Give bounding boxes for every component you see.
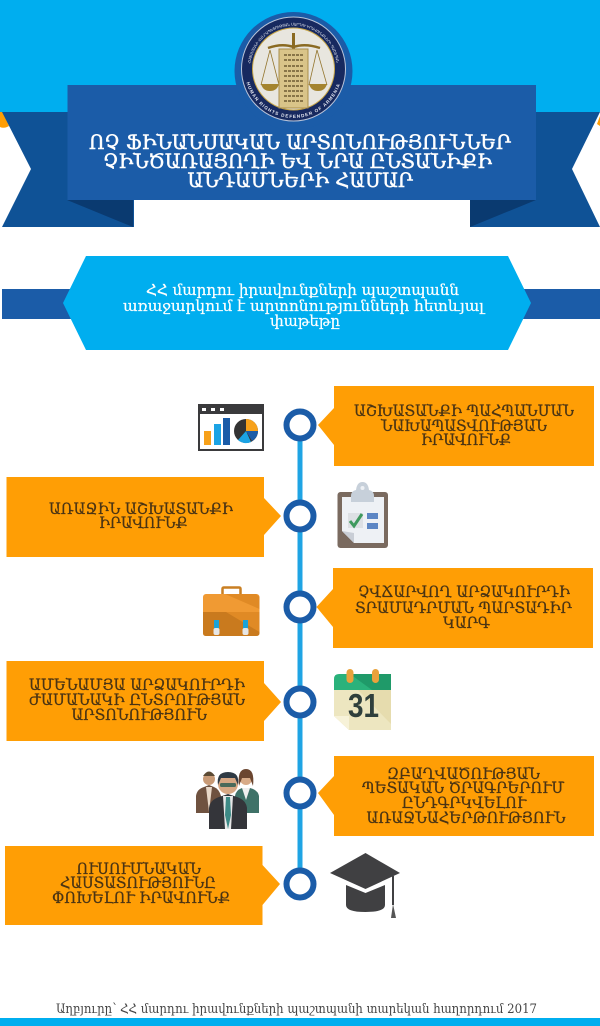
- card 1: ԻՐԱՎՈՒՆՔ: [421, 431, 511, 449]
- card 4: ԱՄԵՆԱՄՅԱ ԱՐՁԱԿՈՒՐԴԻ: [29, 676, 245, 694]
- icon: graduation cap: [330, 853, 400, 918]
- card 1: ՆԱԽԱՊԱՏՎՈՒԹՅԱՆ: [380, 417, 548, 435]
- source note: Աղբյուրը՝ ՀՀ մարդու իրավունքների պաշտպանի տարեկան հաղորդում 2017: [56, 1002, 537, 1017]
- card 1: ԱՇԽԱՏԱՆՔԻ ՊԱՀՊԱՆՄԱՆ: [354, 402, 575, 420]
- title: ՈՉ ՖԻՆԱՆՍԱԿԱՆ ԱՐՏՈՆՈՒԹՅՈՒՆՆԵՐ: [89, 130, 511, 154]
- icon: calendar 31: [334, 669, 391, 730]
- icon: business people: [196, 769, 259, 829]
- card 3: [316, 568, 593, 648]
- icon: briefcase: [203, 588, 260, 636]
- card 6: ՈՒՍՈՒՄՆԱԿԱՆ: [76, 860, 202, 878]
- card 3: ՏՐԱՄԱԴՐՄԱՆ ՊԱՐՏԱԴԻՐ: [355, 599, 572, 617]
- intro hexagon with text: ՀՀ մարդու իրավունքների պաշտպանն: [146, 281, 459, 299]
- title: ՉԻՆԾԱՌԱՅՈՂԻ ԵՎ ՆՐԱ ԸՆՏԱՆԻՔԻ: [103, 149, 493, 173]
- title ribbon: [2, 85, 600, 227]
- icon: dashboard charts: [198, 404, 264, 451]
- timeline nodes: [286, 412, 314, 898]
- card 5: ԱՌԱՋՆԱՀԵՐԹՈՒԹՅՈՒՆ: [366, 809, 566, 827]
- card 4: ԱՐՏՈՆՈՒԹՅՈՒՆ: [72, 706, 208, 724]
- top blue background: [0, 0, 600, 112]
- intro hexagon with text: փաթեթը: [270, 312, 340, 330]
- logo: Human Rights Defender emblem: [234, 12, 352, 122]
- card 5: [318, 756, 594, 836]
- intro hexagon with text: առաջարկում է արտոնությունների հետևյալ: [123, 297, 485, 315]
- title: [89, 130, 511, 192]
- title: ԱՆԴԱՄՆԵՐԻ ՀԱՄԱՐ: [188, 168, 413, 192]
- card 6: [5, 846, 280, 925]
- intro bar: [2, 289, 600, 319]
- card 2: ԻՐԱՎՈՒՆՔ: [99, 514, 188, 532]
- intro hexagon with text: [63, 256, 531, 350]
- card 5: ԸՆԴԳՐԿՎԵԼՈՒ: [402, 794, 527, 812]
- timeline line: [298, 425, 302, 884]
- logo: Human Rights Defender emblem: HUMAN RIGHTS DEFENDER OF ARMENIA: [246, 82, 340, 118]
- card 6: ՀԱՍՏԱՏՈՒԹՅՈՒՆԸ: [60, 874, 216, 892]
- bottom blue bar: [0, 1018, 600, 1026]
- logo: Human Rights Defender emblem: ՀԱՅԱՍՏԱՆԻ ՀԱՆՐԱՊԵՏՈՒԹՅԱՆ ՄԱՐԴՈՒ ԻՐԱՎՈՒՆՔՆԵՐԻ ՊԱՇՏՊԱՆ: [248, 22, 339, 64]
- card 4: ԺԱՄԱՆԱԿԻ ԸՆՏՐՈՒԹՅԱՆ: [29, 691, 246, 709]
- card 2: ԱՌԱՋԻՆ ԱՇԽԱՏԱՆՔԻ: [49, 500, 233, 518]
- card 3: ՉՎՃԱՐՎՈՂ ԱՐՁԱԿՈՒՐԴԻ: [358, 583, 570, 601]
- card 6: ՓՈԽԵԼՈՒ ԻՐԱՎՈՒՆՔ: [52, 889, 230, 907]
- card 5: ԶԲԱՂՎԱԾՈՒԹՅԱՆ: [387, 765, 541, 783]
- card 1: [318, 386, 594, 466]
- card 5: ՊԵՏԱԿԱՆ ԾՐԱԳՐԵՐՈՒՄ: [362, 779, 565, 797]
- orange corner slivers: [0, 112, 600, 128]
- card 3: ԿԱՐԳ: [443, 614, 490, 632]
- icon: clipboard checklist: [338, 482, 388, 548]
- card 4: [6, 661, 281, 741]
- card 2: [6, 477, 281, 557]
- icon: calendar 31: 31: [348, 687, 379, 724]
